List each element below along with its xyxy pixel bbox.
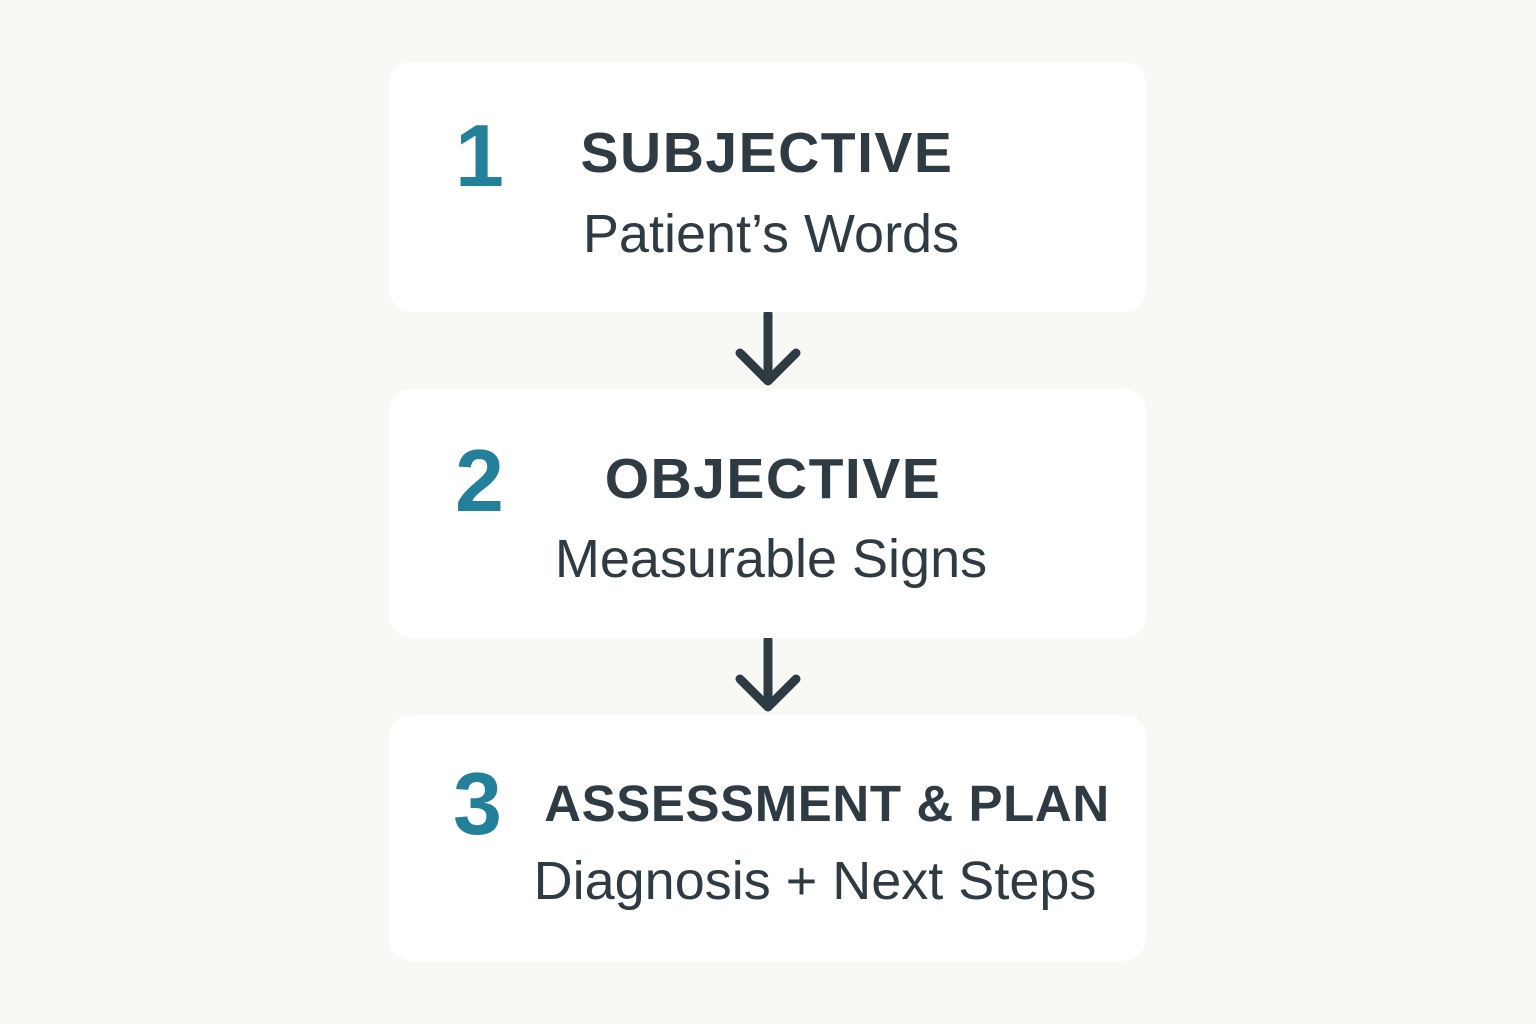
card 1: subjective [389, 62, 1146, 312]
title: subjective: SUBJECTIVE [581, 121, 953, 185]
subtitle: diagnosis + next steps: Diagnosis + Next Steps [534, 851, 1096, 911]
card 2: objective [389, 389, 1146, 638]
subtitle: measurable signs: Measurable Signs [555, 529, 987, 589]
subtitle: patient's words: Patient’s Words [583, 204, 959, 264]
number 1: 1 [455, 106, 504, 205]
card 3: assessment & plan [389, 715, 1146, 961]
arrow 2 [736, 638, 800, 712]
number 3: 3 [453, 754, 502, 853]
arrow 1 [736, 312, 800, 386]
number 2: 2 [455, 431, 504, 530]
title: assessment & plan: ASSESSMENT & PLAN [544, 775, 1110, 832]
title: objective: OBJECTIVE [605, 447, 941, 511]
